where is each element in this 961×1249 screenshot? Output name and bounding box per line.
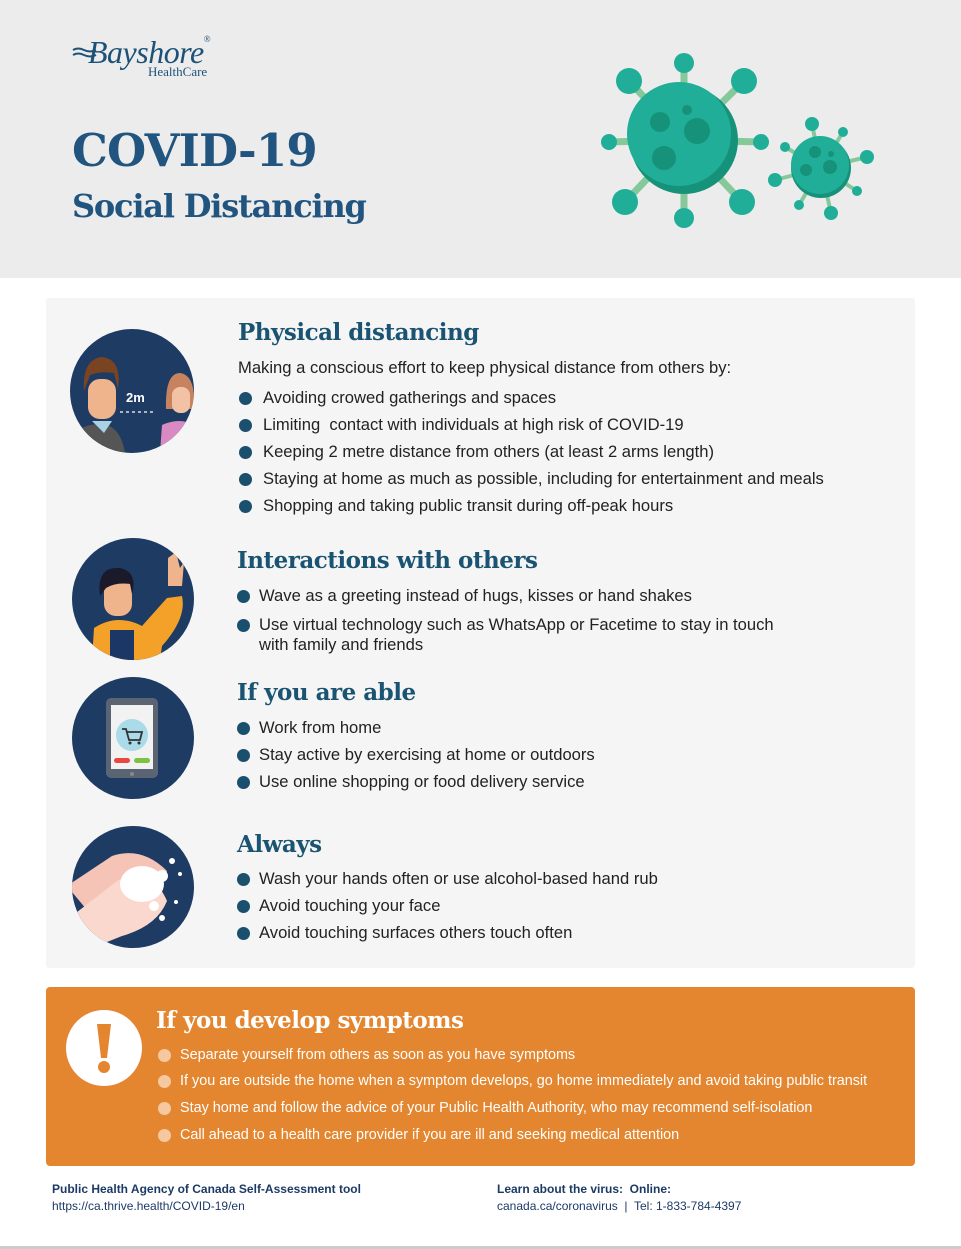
section: physical distancing: Physical distancing bbox=[238, 319, 479, 346]
logo: HealthCare bbox=[148, 64, 207, 79]
icon: tablet bbox=[72, 677, 194, 799]
footer right bbox=[497, 1182, 741, 1213]
section: interactions bbox=[237, 547, 774, 654]
section: physical distancing: Making a conscious effort to keep physical distance from others by: bbox=[238, 358, 731, 377]
footer left: Public Health Agency of Canada Self-Assessment tool bbox=[52, 1182, 361, 1196]
section: interactions: Interactions with others bbox=[237, 547, 537, 574]
heading: symptoms: If you develop symptoms bbox=[156, 1007, 463, 1034]
section: always: Always bbox=[237, 831, 322, 858]
section: if you are able: Work from home bbox=[259, 718, 381, 737]
section: physical distancing: Shopping and taking public transit during off-peak hours bbox=[263, 496, 673, 515]
panel: symptoms: Stay home and follow the advice of your Public Health Authority, who may recommend self-isolation bbox=[180, 1100, 812, 1116]
section: interactions: Use virtual technology such as WhatsApp or Facetime to stay in touch bbox=[259, 615, 774, 634]
section: always bbox=[236, 831, 658, 942]
panel: symptoms: Call ahead to a health care provider if you are ill and seeking medical attention bbox=[180, 1127, 679, 1143]
footer right: Learn about the virus: Online: bbox=[497, 1182, 671, 1196]
subtitle: Social Distancing bbox=[72, 187, 366, 225]
icon: waving person bbox=[72, 538, 194, 660]
icon: people 2m: 2m bbox=[126, 390, 145, 405]
panel: symptoms bbox=[46, 987, 915, 1166]
icon: virus bbox=[601, 53, 874, 228]
section: physical distancing bbox=[238, 319, 824, 515]
panel: symptoms: Separate yourself from others as soon as you have symptoms bbox=[180, 1047, 575, 1063]
section: if you are able: If you are able bbox=[237, 679, 416, 706]
icon: people 2m bbox=[70, 329, 194, 453]
section: physical distancing: Keeping 2 metre distance from others (at least 2 arms length) bbox=[263, 442, 714, 461]
icon: exclamation bbox=[66, 1010, 142, 1086]
section: interactions: Wave as a greeting instead of hugs, kisses or hand shakes bbox=[259, 586, 692, 605]
icon: hand washing bbox=[72, 826, 194, 948]
footer left bbox=[52, 1182, 361, 1213]
section: physical distancing: Staying at home as much as possible, including for entertainment and meals bbox=[263, 469, 824, 488]
section: always: Wash your hands often or use alcohol-based hand rub bbox=[259, 869, 658, 888]
logo: Bayshore® bbox=[88, 34, 210, 70]
title: COVID-19 bbox=[72, 124, 317, 177]
section: always: Avoid touching surfaces others touch often bbox=[259, 923, 572, 942]
section: if you are able: Stay active by exercising at home or outdoors bbox=[259, 745, 595, 764]
footer right: canada.ca/coronavirus | Tel: 1-833-784-4397 bbox=[497, 1199, 741, 1213]
section: if you are able: Use online shopping or food delivery service bbox=[259, 772, 585, 791]
section: if you are able bbox=[237, 679, 595, 791]
section: interactions: with family and friends bbox=[259, 635, 423, 654]
panel: guidance bbox=[46, 298, 915, 968]
section: physical distancing: Limiting contact with individuals at high risk of COVID-19 bbox=[263, 415, 684, 434]
header background bbox=[0, 0, 961, 278]
section: always: Avoid touching your face bbox=[259, 896, 440, 915]
footer left: https://ca.thrive.health/COVID-19/en bbox=[52, 1199, 245, 1213]
section: physical distancing: Avoiding crowed gatherings and spaces bbox=[263, 388, 556, 407]
panel: symptoms: If you are outside the home when a symptom develops, go home immediately and avoid taking public transit bbox=[180, 1073, 867, 1089]
